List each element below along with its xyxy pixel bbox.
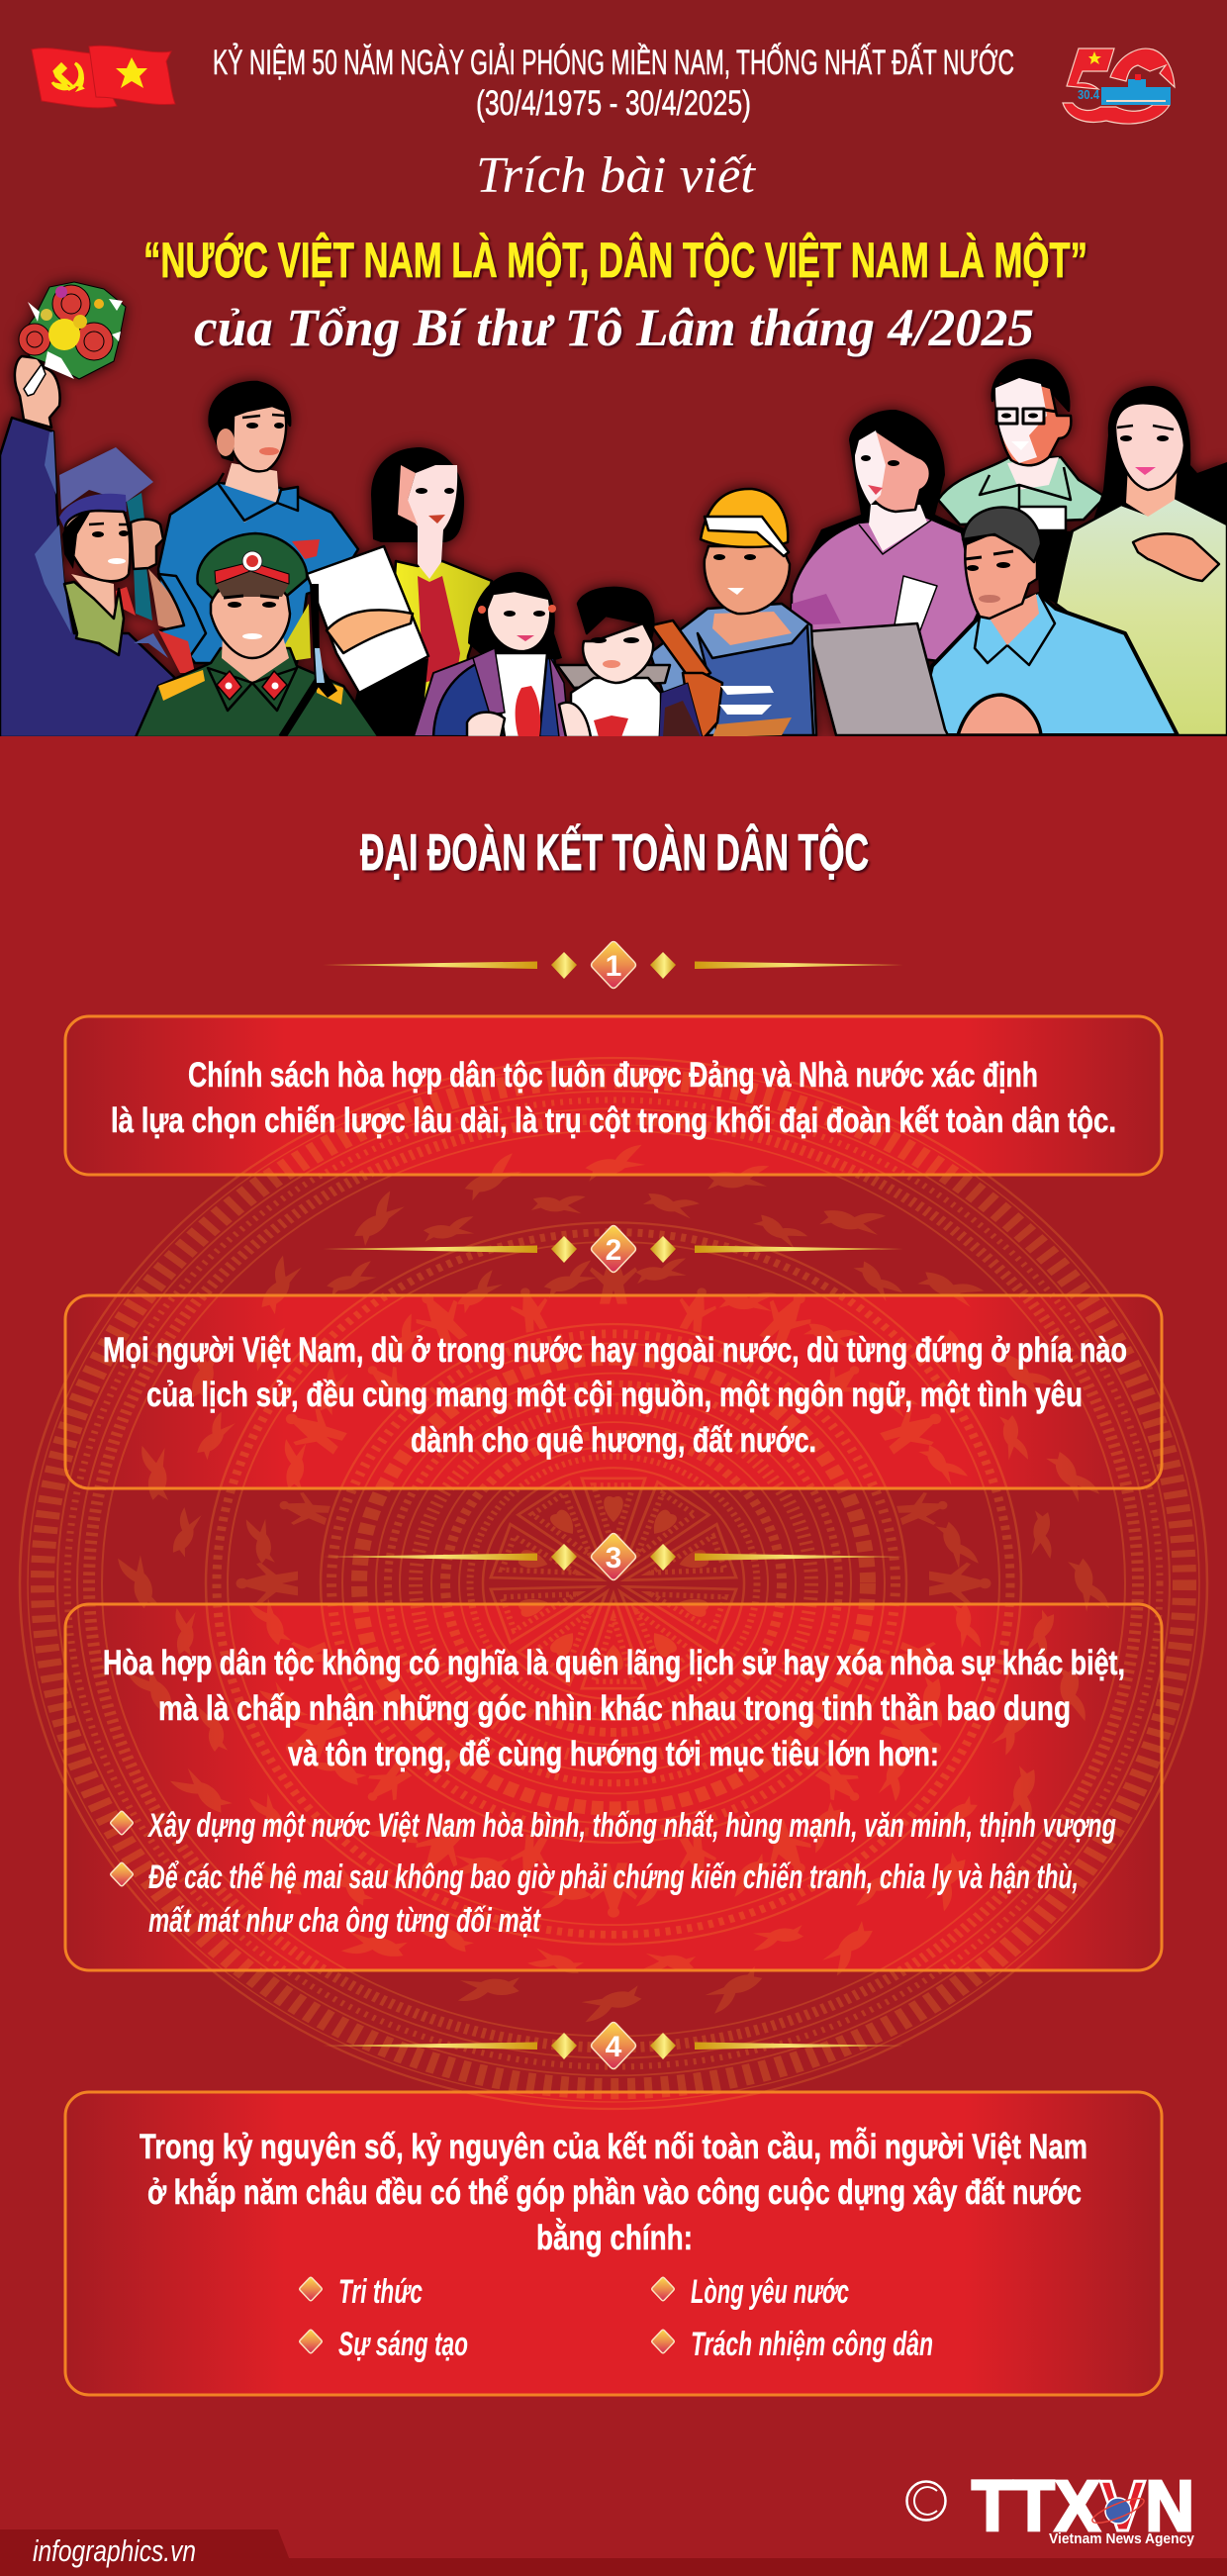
man with glasses and mint shirt — [938, 360, 1105, 530]
panel 3: và tôn trọng, để cùng hướng tới mục tiêu lớn hơn: — [288, 1735, 939, 1773]
panel 4: Sự sáng tạo — [338, 2326, 468, 2363]
divider 3 — [323, 1534, 903, 1579]
header line 2: dates: (30/4/1975 - 30/4/2025) — [476, 84, 751, 123]
divider 2 — [323, 1225, 903, 1273]
icon: copyright — [906, 2482, 946, 2520]
subtitle: Trích bài viết: Trích bài viết — [476, 147, 757, 204]
drum pattern background — [0, 1047, 1227, 2120]
worker with yellow helmet — [650, 489, 816, 737]
woman in yellow jacket with paper — [307, 447, 492, 737]
divider 3: 3 — [606, 1542, 621, 1574]
footer site text: infographics.vn — [33, 2533, 196, 2568]
divider 1 — [323, 942, 903, 988]
logo: 50 years: 30.4 — [1078, 87, 1100, 102]
boy student — [557, 588, 703, 737]
panel 4: Tri thức — [338, 2273, 423, 2311]
panel 4: Trách nhiệm công dân — [691, 2326, 933, 2363]
graduate raising a bouquet — [0, 356, 206, 737]
soldier — [136, 533, 379, 737]
divider 4: 4 — [606, 2031, 622, 2063]
header background — [0, 0, 1227, 736]
icon: party and national flags — [32, 46, 175, 108]
panel 3 — [63, 1603, 1164, 1971]
divider 1: 1 — [606, 950, 621, 983]
panel 3: mất mát như cha ông từng đối mặt — [148, 1902, 541, 1940]
man in blue shirt — [158, 382, 358, 663]
title line author: của Tổng Bí thư Tô Lâm tháng 4/2025 — [194, 298, 1034, 357]
woman in ao dai — [1056, 386, 1227, 735]
heading: ĐẠI ĐOÀN KẾT TOÀN DÂN TỘC — [360, 823, 869, 882]
panel 4 — [63, 2090, 1164, 2397]
woman in purple sweater — [792, 410, 978, 663]
girl student with backpack — [414, 572, 591, 737]
logo: 50 years — [1063, 48, 1175, 124]
logo: TTXVN: TTXVN — [972, 2467, 1194, 2546]
illustration: group of people — [0, 282, 1227, 737]
panel 4: bằng chính: — [536, 2218, 693, 2257]
divider 2: 2 — [606, 1234, 621, 1267]
panel 2 — [63, 1294, 1164, 1490]
footer band — [0, 2558, 1227, 2576]
panel 1 — [63, 1015, 1164, 1176]
footer tab — [0, 2529, 296, 2576]
man with laptop in light blue shirt — [808, 507, 1178, 735]
icon: bouquet of flowers — [19, 282, 126, 379]
panel 2: dành cho quê hương, đất nước. — [411, 1421, 816, 1460]
divider 4 — [323, 2023, 903, 2068]
logo: TTXVN: Vietnam News Agency — [1049, 2530, 1195, 2547]
panel 4: Lòng yêu nước — [691, 2273, 849, 2311]
